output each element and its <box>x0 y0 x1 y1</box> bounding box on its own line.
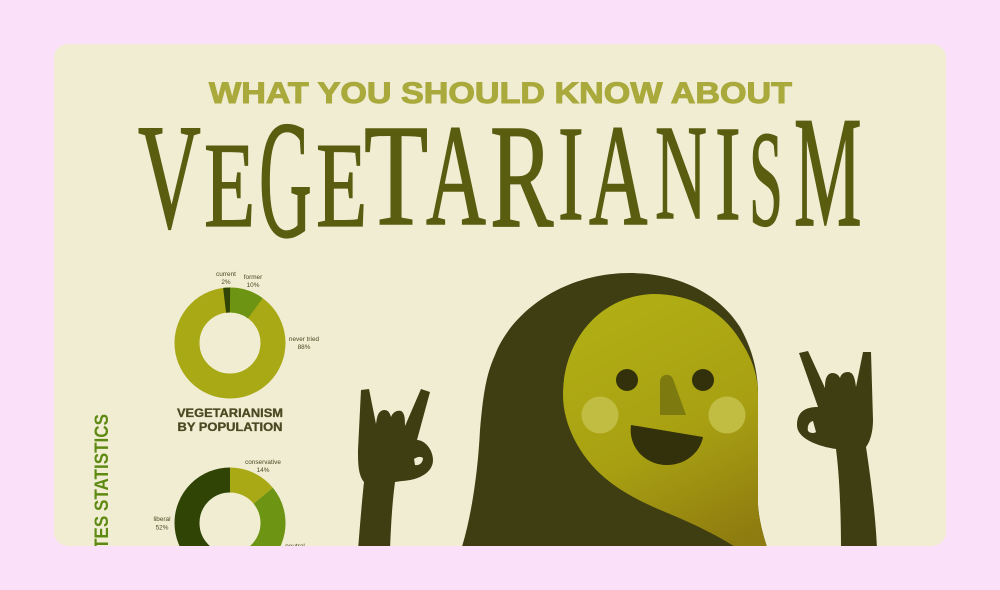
heading: subtitle: WHAT YOU SHOULD KNOW ABOUT <box>209 77 792 110</box>
title: Vegetarianism: E <box>204 118 255 253</box>
title: Vegetarianism: N <box>655 97 707 248</box>
label: former: former <box>244 274 262 281</box>
segment: conservative 14% <box>230 480 263 496</box>
title: Vegetarianism: E <box>316 118 367 253</box>
title: Vegetarianism: A <box>589 96 647 256</box>
title: Vegetarianism: R <box>490 94 553 258</box>
left cheek <box>582 396 618 434</box>
segment: former 10% <box>230 300 255 308</box>
mouth <box>631 425 703 465</box>
label: neutral: neutral <box>285 543 305 550</box>
hair and body <box>461 273 768 550</box>
label: liberal: liberal <box>153 516 171 523</box>
title: Vegetarianism: S <box>749 104 783 255</box>
heading: by population line two: BY POPULATION <box>178 422 282 434</box>
title: Vegetarianism: A <box>426 95 486 256</box>
panel: background card <box>54 44 946 546</box>
title: Vegetarianism: I <box>558 98 584 249</box>
left arm and hand <box>358 389 433 550</box>
chart: political views donut <box>187 480 273 566</box>
right eye <box>692 369 714 391</box>
title: Vegetarianism: V <box>138 94 201 260</box>
chart: vegetarianism by population donut <box>187 300 273 386</box>
right arm and hand <box>797 351 877 550</box>
label: liberal: 52% <box>156 524 169 532</box>
segment: current 2% <box>225 287 230 313</box>
nose <box>660 375 686 415</box>
label: current: current <box>216 271 236 278</box>
title: Vegetarianism: M <box>794 85 862 259</box>
segment: never tried 88% <box>187 300 273 386</box>
heading: vegetarianism by population: VEGETARIANISM <box>177 408 283 420</box>
label: current: 2% <box>221 279 231 286</box>
left eye <box>616 369 638 391</box>
title: Vegetarianism <box>138 85 862 274</box>
heading: vertical statistics label: TES STATISTICS <box>92 414 113 549</box>
label: conservative: 14% <box>257 467 270 474</box>
segment: neutral 34% <box>250 488 286 546</box>
label: conservative: conservative <box>245 459 281 466</box>
label: never tried: 88% <box>298 344 311 351</box>
label: never tried: never tried <box>289 336 319 343</box>
title: Vegetarianism: G <box>259 88 312 274</box>
face <box>563 294 768 550</box>
segment: liberal 52% <box>187 480 235 566</box>
label: former: 10% <box>247 282 260 289</box>
title: Vegetarianism: T <box>364 96 428 256</box>
illustration: character <box>358 273 877 550</box>
title: Vegetarianism: I <box>715 98 741 249</box>
right cheek <box>708 396 746 434</box>
